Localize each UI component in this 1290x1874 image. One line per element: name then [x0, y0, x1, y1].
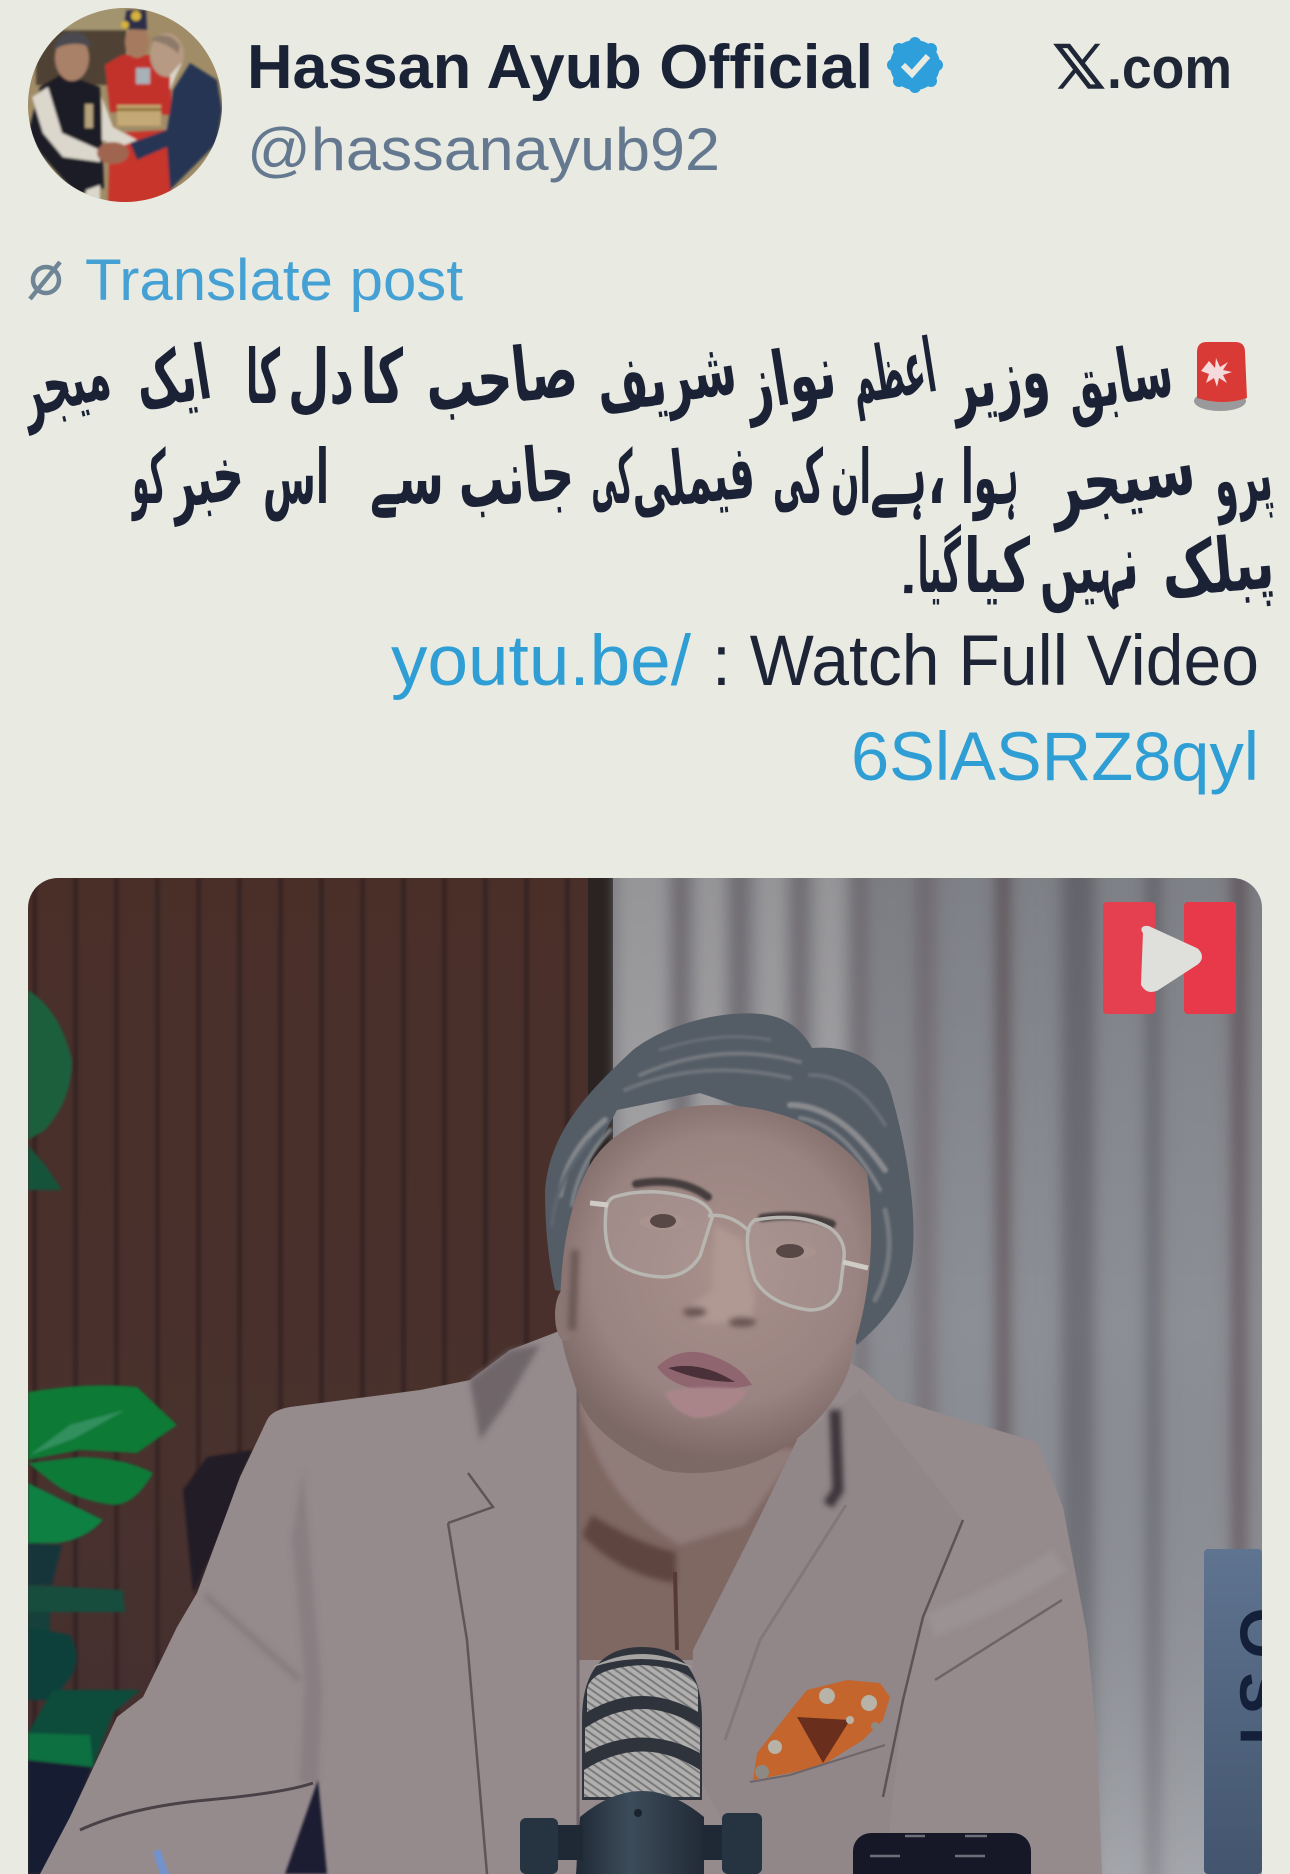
microphone — [520, 1647, 762, 1874]
eyebrows — [636, 1182, 832, 1224]
avatar — [28, 8, 222, 202]
urdu line 2: ان — [831, 435, 871, 522]
urdu line 1: شریف — [590, 325, 742, 433]
urdu line 2: فیملی — [626, 429, 759, 528]
urdu line 2: ہوا — [961, 435, 1019, 522]
video thumbnail — [28, 860, 1290, 1874]
urdu line 1: صاحب — [421, 327, 582, 430]
urdu line 1 — [8, 323, 1178, 437]
urdu line 2: ہے، — [870, 435, 946, 522]
icon: siren emoji — [1194, 342, 1247, 411]
urdu line 3: نہیں — [1034, 520, 1142, 616]
urdu line 2: خبر — [161, 430, 249, 528]
book with lettering — [1204, 1549, 1262, 1874]
translate link: Translate post — [85, 248, 463, 313]
urdu line 2: کو — [131, 435, 166, 522]
link and watch text: : Watch Full Video — [712, 622, 1259, 701]
nose — [683, 1225, 756, 1327]
urdu line 2: جانب — [454, 430, 577, 527]
plant — [28, 990, 177, 1874]
jacket shading — [205, 1345, 1060, 1783]
glasses — [590, 1192, 868, 1310]
urdu line 2: سیجر — [1041, 424, 1201, 533]
urdu line 2: سے — [370, 435, 444, 522]
icon: verified badge — [887, 37, 943, 93]
urdu line 1: نواز — [737, 329, 841, 429]
pocket square — [750, 1680, 890, 1782]
urdu line 3: پبلک — [1158, 519, 1277, 616]
urdu line 2 — [131, 424, 1278, 533]
hair — [545, 1013, 913, 1345]
mouth — [657, 1352, 752, 1418]
urdu line 1: ایک — [130, 330, 216, 427]
account name: Hassan Ayub Official — [247, 33, 873, 102]
urdu post text — [8, 323, 1278, 616]
X.com logo text: 𝕏 — [1051, 33, 1107, 103]
pen — [153, 1849, 169, 1874]
urdu line 2: اس — [263, 435, 329, 522]
link and watch text — [391, 622, 1259, 795]
urdu line 1: سابق — [1060, 327, 1178, 430]
shirt and neck — [578, 1380, 800, 1660]
urdu line 3: گیا۔ — [899, 524, 961, 611]
urdu line 1: اعظم — [845, 323, 941, 422]
grey curtain — [613, 860, 1273, 1874]
X.com logo text: .com — [1107, 36, 1232, 101]
urdu line 2: کی — [773, 435, 823, 522]
chair — [183, 1450, 253, 1593]
account handle: @hassanayub92 — [247, 116, 720, 183]
wood panel wall — [28, 878, 618, 1874]
urdu line 3 — [899, 519, 1277, 616]
coffee mug — [853, 1833, 1031, 1874]
jacket lapels — [448, 1370, 963, 1874]
link and watch text: youtu.be/ — [391, 622, 691, 701]
eyes — [650, 1214, 804, 1258]
urdu line 1: دل — [288, 335, 354, 422]
X.com logo text — [1051, 33, 1232, 103]
link and watch text: 6SlASRZ8qyl — [851, 718, 1259, 795]
urdu line 1: کا — [361, 335, 404, 422]
icon: translate — [30, 262, 60, 299]
urdu line 2: کی — [592, 435, 633, 522]
face — [555, 1105, 871, 1473]
jacket — [40, 1328, 1102, 1874]
urdu line 3: کیا — [964, 524, 1031, 611]
urdu line 1: وزیر — [942, 328, 1054, 430]
urdu line 1: کا — [246, 335, 281, 422]
channel logo — [1103, 902, 1236, 1014]
urdu line 1: میجر — [8, 330, 118, 437]
